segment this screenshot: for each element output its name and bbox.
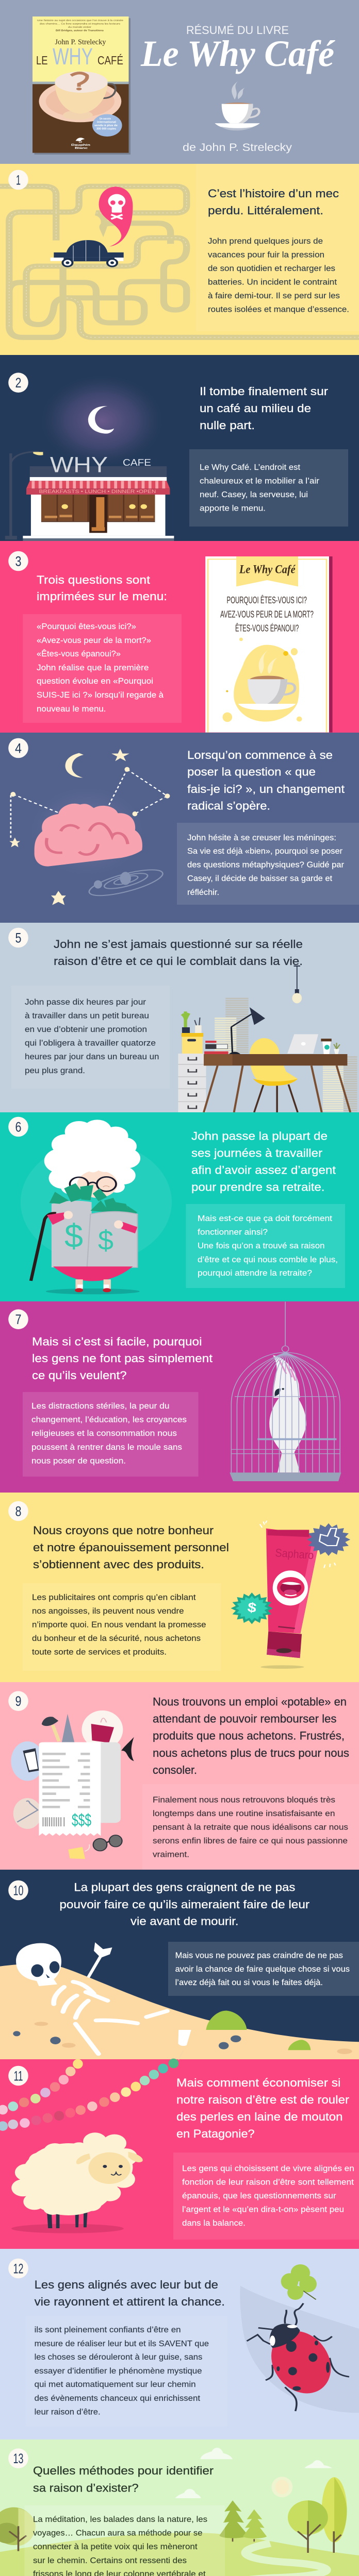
text panel: du bonheur et de la sécurité, nous achetons (32, 1634, 201, 1643)
heading: consoler. (153, 1764, 197, 1776)
heading: Les gens alignés avec leur but de (35, 2278, 218, 2291)
heading: C’est l’histoire d’un mec (208, 187, 339, 200)
text panel: «Pourquoi êtes-vous ici?» (37, 622, 136, 631)
text panel (186, 1204, 345, 1288)
heading: les gens ne font pas simplement (32, 1352, 213, 1365)
text panel (23, 614, 182, 723)
text panel: qui l’obligera à travailler quatorze (25, 1039, 156, 1048)
heading: ses journées à travailler (191, 1147, 323, 1159)
heading: Mais si c’est si facile, pourquoi (32, 1335, 202, 1348)
text panel: John hésite à se creuser les méninges: (187, 834, 336, 842)
text panel (25, 2505, 225, 2576)
number badge 7 (8, 1309, 28, 1329)
book cover: Dauphin (71, 144, 90, 147)
heading (35, 2278, 225, 2308)
illustration: lipstick tube with badges: $ (247, 1599, 258, 1616)
text panel: mesure de réaliser leur but et ils SAVENT que (35, 2340, 209, 2348)
panel: step 3 (0, 541, 359, 733)
illustration: grandmother with money bags (21, 1120, 172, 1294)
heading (54, 938, 303, 968)
text panel (23, 1583, 221, 1671)
book cover: CAFÉ (97, 54, 123, 67)
number badge 8: 8 (15, 1503, 22, 1519)
text panel: à travailler dans un petit bureau (25, 1012, 149, 1020)
text panel: fonction de leur raison d’être sont tellement (182, 2178, 354, 2187)
illustration: why cafe building: WHY (50, 453, 108, 478)
text block: John prend quelques jours de (208, 237, 323, 246)
heading: imprimées sur le menu: (37, 590, 167, 603)
number badge 4 (8, 738, 28, 758)
heading: sa raison d’exister? (33, 2482, 139, 2495)
panel: step 6 (0, 1112, 359, 1301)
heading (208, 187, 339, 217)
text block: vacances pour fuir la pression (208, 250, 324, 260)
text panel: poussent à rentrer dans le moule sans (31, 1443, 182, 1452)
book cover: Une histoire au sujet des occasions que l’on trouve à la croisée (37, 19, 124, 22)
heading: raison d’être et ce qui le comblait dans la vie. (54, 955, 303, 968)
panel: step 9 (0, 1682, 359, 1870)
text panel: neuf. Casey, la serveuse, lui (200, 490, 308, 499)
heading: pour prendre sa retraite. (191, 1181, 325, 1194)
text panel: d’être et ce qui nous comble le plus, (198, 1256, 338, 1264)
illustration: shopping receipt and products: $$$ (72, 1810, 91, 1829)
number badge 12: 12 (13, 2261, 24, 2276)
menu card (205, 556, 333, 733)
text panel: des évènements chanceux qui enrichissent (35, 2394, 201, 2403)
heading: Trois questions sont (37, 573, 151, 586)
text panel: qui met automatiquement sur leur chemin (35, 2380, 196, 2389)
heading: Il tombe finalement sur (200, 385, 329, 398)
heading: nulle part. (200, 419, 255, 432)
illustration: cockatoo in a cage (230, 1302, 341, 1481)
heading: radical s’opère. (187, 800, 270, 812)
heading: ce qu’ils veulent? (32, 1369, 127, 1382)
number badge 3 (8, 551, 28, 571)
illustration: wool beads (0, 2050, 183, 2131)
illustration: skeleton in the sand (0, 1942, 359, 2059)
heading: Quelles méthodes pour identifier (33, 2464, 214, 2477)
heading: La plupart des gens craignent de ne pas (74, 1881, 295, 1894)
heading: poser la question « que (187, 766, 316, 778)
number badge 5 (8, 928, 28, 947)
number badge 12 (8, 2259, 28, 2278)
text panel: Le Why Café. L’endroit est (200, 463, 301, 472)
text block: de son quotidien et recharger les (208, 264, 335, 273)
number badge 6 (8, 1117, 28, 1137)
number badge 1 (8, 170, 28, 190)
title: Le Why Café (140, 33, 335, 74)
heading (153, 1696, 349, 1776)
text panel: Finalement nous nous retrouvons bloqués très (153, 1796, 335, 1805)
heading: produits que nous achetons. Frustrés, (153, 1730, 345, 1742)
heading (200, 385, 329, 432)
book cover: Le (79, 141, 82, 144)
illustration: brain constellation (9, 749, 170, 905)
text panel: question évolue en «Pourquoi (37, 677, 153, 686)
number badge 6: 6 (15, 1119, 22, 1134)
illustration: lipstick tube with badges: Sapharo (275, 1546, 314, 1562)
book cover: Blanc (75, 147, 88, 150)
heading (33, 2464, 214, 2495)
heading: Lorsqu’on commence à se (187, 749, 333, 761)
panel: step 1 (0, 164, 359, 355)
number badge 11: 11 (13, 2068, 23, 2083)
text panel (177, 823, 359, 905)
text block: batteries. Un incident le contraint (208, 278, 337, 286)
text panel (23, 1392, 198, 1477)
book cover (32, 16, 130, 155)
text panel: «Avez-vous peur de la mort?» (37, 636, 151, 645)
text panel (26, 2316, 227, 2427)
illustration: ladybug and clover (240, 2264, 359, 2413)
heading: vie rayonnent et attirent la chance. (35, 2295, 225, 2308)
text panel: ils sont pleinement confiants d’être en (35, 2326, 181, 2334)
text panel: en vue d’obtenir une promotion (25, 1025, 147, 1034)
heading (37, 573, 167, 603)
text panel: réfléchir. (187, 888, 219, 897)
number badge 4: 4 (15, 741, 22, 756)
text panel: John passe dix heures par jour (25, 998, 146, 1007)
text panel: chaleureux et le mobilier a l’air (200, 477, 320, 485)
text panel: les choses se dérouleront à leur guise, sans (35, 2353, 202, 2362)
panel: step 11 (0, 2050, 359, 2249)
heading (33, 1524, 229, 1571)
text panel (173, 2153, 359, 2240)
illustration: why cafe building: BREAKFASTS • LUNCH • DINNER •OPEN (39, 489, 156, 494)
illustration: grandmother with money bags: $ (98, 1225, 113, 1256)
book cover: LE (36, 54, 47, 67)
heading: des perles en laine de mouton (176, 2110, 342, 2123)
menu card: ÊTES-VOUS ÉPANOUI? (235, 623, 299, 634)
heading: John passe la plupart de (191, 1130, 328, 1143)
text block (208, 237, 349, 314)
book cover: Un succès (100, 117, 111, 121)
illustration: office desk (178, 966, 350, 1112)
heading: afin d’avoir assez d’argent (191, 1164, 336, 1177)
text panel: connecter à la petite voix qui les mèneront (33, 2543, 198, 2551)
text panel: pourquoi attendre la retraite? (198, 1269, 312, 1278)
text panel: avoir la chance de faire quelque chose si vous (175, 1965, 350, 1974)
text panel: changement, l’éducation, les croyances (31, 1416, 187, 1425)
text panel: Sa vie est déjà «bien», pourquoi se poser (187, 847, 343, 856)
number badge 13 (8, 2448, 28, 2468)
heading: perdu. Littéralement. (208, 204, 323, 217)
heading: notre raison d’être est de rouler (176, 2093, 350, 2106)
panel: step 12 (0, 2249, 359, 2439)
text panel: leur raison d’être. (35, 2408, 101, 2417)
text panel (168, 1942, 359, 1996)
panel: step 13 (0, 2439, 359, 2576)
heading (59, 1881, 310, 1928)
panel: header (0, 0, 359, 164)
book cover: 300 000 copies (96, 128, 116, 131)
number badge 2 (8, 372, 28, 393)
number badge 10 (8, 1880, 28, 1900)
icon: coffee cup (215, 81, 260, 130)
number badge 2: 2 (15, 375, 22, 391)
text panel: SUIS-JE ici ?» lorsqu’il regarde à (37, 691, 164, 700)
illustration: lipstick tube with badges (231, 1521, 350, 1669)
text panel: serons enfin libres de faire ce qui nous passionne (153, 1837, 348, 1845)
number badge 9 (8, 1691, 28, 1711)
number badge 9: 9 (15, 1693, 22, 1709)
text panel: Les distractions stériles, la peur du (31, 1402, 169, 1411)
text panel: nous poser de question. (31, 1457, 126, 1466)
text panel: essayer d’identifier le phénomène mystique (35, 2367, 202, 2376)
text panel: Une fois qu’on a trouvé sa raison (198, 1242, 325, 1250)
text panel: Mais vous ne pouvez pas craindre de ne pas (175, 1952, 343, 1960)
heading: Nous trouvons un emploi «potable» en (153, 1696, 347, 1708)
text panel: dans la balance. (182, 2219, 246, 2228)
text panel: l’avez déjà fait ou si vous le faites déjà. (175, 1978, 323, 1987)
heading: un café au milieu de (200, 402, 311, 415)
text block: à faire demi-tour. Il se perd sur les (208, 292, 340, 300)
illustration: grandmother with money bags: $ (64, 1217, 83, 1255)
icon: skull location pin (99, 187, 133, 247)
panel: step 2 (0, 355, 359, 541)
text panel: voyages… Chacun aura sa méthode pour se (33, 2529, 202, 2538)
illustration: shopping receipt and products (11, 1710, 134, 1859)
illustration: moon glow (36, 371, 168, 470)
text panel: longtemps dans une routine insatisfaisante en (153, 1809, 335, 1818)
number badge 5: 5 (15, 930, 22, 946)
number badge 13: 13 (13, 2451, 24, 2466)
text panel (189, 449, 348, 527)
number badge 10: 10 (13, 1883, 24, 1898)
number badge 8 (8, 1501, 28, 1521)
heading (32, 1335, 213, 1382)
text panel: La méditation, les balades dans la nature, les (33, 2515, 207, 2524)
text panel: religieuses et la consommation nous (31, 1429, 177, 1438)
book cover: du monde entier (68, 26, 92, 28)
heading: Mais comment économiser si (176, 2076, 340, 2089)
heading: fais-je ici? », un changement (187, 783, 345, 795)
text panel: Les publicitaires ont compris qu’en ciblant (32, 1594, 196, 1602)
text panel: «Êtes-vous épanoui?» (37, 649, 121, 658)
menu card: Le Why Café (239, 563, 296, 576)
icon: car (51, 240, 124, 267)
heading: Nous croyons que notre bonheur (33, 1524, 214, 1537)
heading: pouvoir faire ce qu’ils aimeraient faire de leur (59, 1898, 310, 1911)
text panel: vraiment. (153, 1851, 189, 1859)
heading: en Patagonie? (176, 2127, 255, 2140)
text panel: nouveau le menu. (37, 705, 106, 714)
book cover: des chemins… Ce livre surprendra et inspirera les lecteurs (40, 23, 121, 25)
heading: et notre épanouissement personnel (33, 1541, 229, 1554)
panel: step 7 (0, 1301, 359, 1493)
text block: routes isolées et manque d’essence. (208, 305, 349, 314)
illustration: why cafe building: CAFE (123, 457, 151, 468)
heading (187, 749, 345, 812)
panel: step 8 (0, 1493, 359, 1682)
number badge 1: 1 (16, 172, 21, 188)
heading: vie avant de mourir. (130, 1915, 238, 1928)
illustration: tangled roads (0, 187, 359, 337)
number badge 11 (8, 2066, 28, 2086)
text panel: pensant à la retraite que nous idéalisons car nous (153, 1823, 348, 1832)
panel: step 5 (0, 923, 359, 1112)
text panel: apporte le menu. (200, 504, 266, 513)
illustration: sheep (11, 2132, 143, 2233)
text panel: Casey, il décide de baisser sa garde et (187, 874, 333, 883)
heading: attendant de pouvoir rembourser les (153, 1713, 336, 1725)
text panel: épanouis, que les questionnements sur (182, 2192, 336, 2200)
illustration: landscape with river and trees (0, 2448, 359, 2576)
text panel: John réalise que la première (37, 664, 149, 672)
book cover: Bill Bridges, auteur de Transitions (56, 29, 104, 32)
author: de John P. Strelecky (183, 142, 292, 154)
text panel: heures par jour dans un bureau un (25, 1053, 159, 1061)
text panel: des questions métaphysiques? Guidé par (187, 860, 345, 870)
text panel: toute sorte de services et produits. (32, 1648, 167, 1657)
book cover: vendu à plus de (94, 124, 118, 127)
subtitle: RÉSUMÉ DU LIVRE (186, 24, 289, 37)
text panel: Mais est-ce que ça doit forcément (198, 1214, 333, 1223)
book cover: WHY (53, 43, 93, 70)
text panel: sur le chemin. Certains ont ressenti des (33, 2556, 187, 2565)
text panel: nos angoisses, ils peuvent nous vendre (32, 1607, 184, 1616)
text panel: peu plus grand. (25, 1066, 85, 1075)
text panel: fonctionner ainsi? (198, 1228, 268, 1237)
panel: step 10 (0, 1870, 359, 2059)
heading (176, 2076, 350, 2140)
heading: s’obtiennent avec des produits. (33, 1558, 204, 1571)
text panel: l’argent et le «qu’en dira-t-on» pèsent peu (182, 2205, 344, 2214)
number badge 3: 3 (15, 553, 22, 569)
illustration: why cafe building (5, 452, 174, 541)
menu card: POURQUOI ÊTES-VOUS ICI? (227, 595, 307, 605)
heading (191, 1130, 336, 1194)
panel: step 4 (0, 733, 359, 923)
book cover: John P. Strelecky (55, 38, 106, 46)
text panel: n’importe quoi. En nous vendant la promesse (32, 1621, 206, 1630)
text panel (11, 986, 170, 1089)
heading: John ne s’est jamais questionné sur sa réelle (54, 938, 303, 951)
book cover: international (97, 121, 117, 124)
text panel (142, 1784, 359, 1870)
text panel: Les gens qui choisissent de vivre alignés en (182, 2164, 354, 2173)
heading: nous achetons plus de trucs pour nous (153, 1747, 349, 1759)
number badge 7: 7 (15, 1312, 22, 1327)
